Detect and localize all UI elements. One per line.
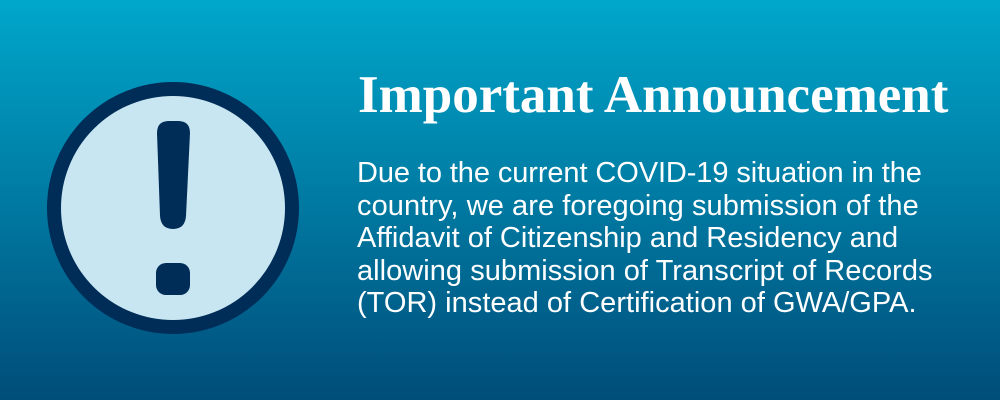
announcement text: (TOR) instead of Certification of GWA/GPA. bbox=[357, 287, 917, 319]
announcement text: allowing submission of Transcript of Records bbox=[357, 254, 933, 286]
icon: exclamation mark in circle bbox=[47, 82, 299, 334]
title: Important Announcement bbox=[358, 66, 948, 124]
announcement text bbox=[357, 157, 933, 319]
announcement text: country, we are foregoing submission of the bbox=[357, 190, 919, 222]
announcement text: Due to the current COVID-19 situation in the bbox=[357, 157, 922, 189]
announcement text: Affidavit of Citizenship and Residency and bbox=[357, 222, 898, 254]
